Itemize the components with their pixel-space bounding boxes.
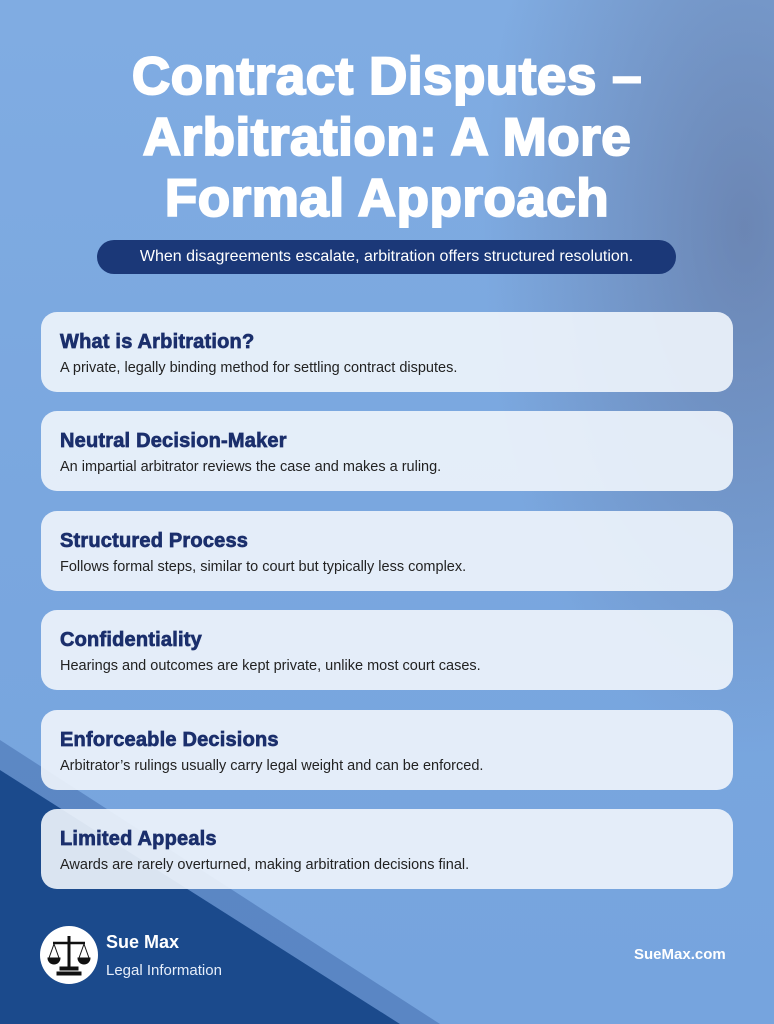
card: enforceable decisions: Enforceable Decisions — [60, 729, 279, 751]
subtitle pill — [97, 240, 676, 274]
logo — [40, 926, 222, 984]
card: confidentiality: Hearings and outcomes are kept private, unlike most court cases. — [60, 658, 481, 674]
card: what is arbitration — [41, 312, 733, 392]
title: Arbitration: A More — [143, 108, 631, 167]
card: what is arbitration: What is Arbitration? — [60, 331, 254, 353]
website: SueMax.com — [634, 946, 726, 963]
card: what is arbitration: A private, legally binding method for settling contract disputes. — [60, 360, 457, 376]
card: structured process — [41, 511, 733, 591]
card: neutral decision-maker: Neutral Decision-Maker — [60, 430, 287, 452]
card: limited appeals — [41, 809, 733, 889]
card: neutral decision-maker — [41, 411, 733, 491]
card: confidentiality — [41, 610, 733, 690]
title — [132, 47, 642, 228]
card: neutral decision-maker: An impartial arbitrator reviews the case and makes a ruling. — [60, 459, 441, 475]
brand text: Sue Max — [106, 932, 179, 952]
card: limited appeals: Awards are rarely overturned, making arbitration decisions final. — [60, 857, 469, 873]
logo: Legal Information — [106, 962, 222, 979]
card: confidentiality: Confidentiality — [60, 629, 202, 651]
icon: scales — [40, 926, 98, 984]
card: enforceable decisions — [41, 710, 733, 790]
card: structured process: Structured Process — [60, 530, 248, 552]
card: structured process: Follows formal steps, similar to court but typically less complex. — [60, 559, 466, 575]
card: enforceable decisions: Arbitrator’s rulings usually carry legal weight and can be enforced. — [60, 758, 483, 774]
subtitle pill: When disagreements escalate, arbitration offers structured resolution. — [140, 248, 633, 265]
title: Contract Disputes – — [132, 47, 642, 106]
card: limited appeals: Limited Appeals — [60, 828, 217, 850]
title: Formal Approach — [165, 169, 609, 228]
